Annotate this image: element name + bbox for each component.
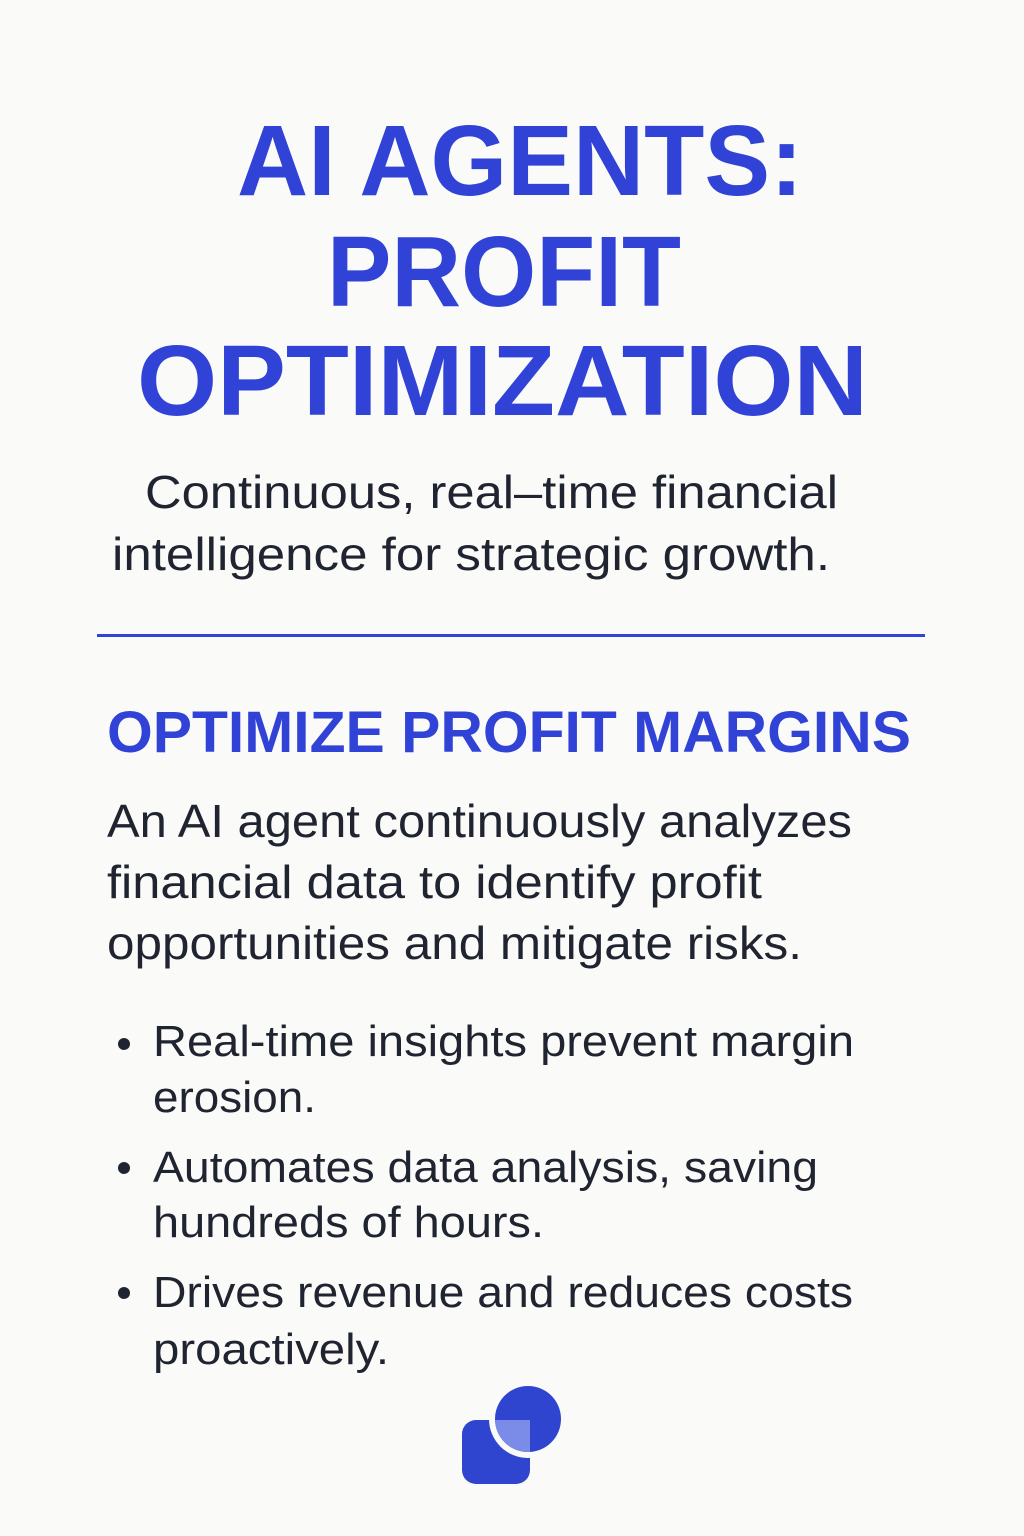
bullet list: proactively. bbox=[153, 1325, 389, 1374]
bullet list: hundreds of hours. bbox=[153, 1198, 544, 1247]
bullet list: Automates data analysis, saving bbox=[153, 1143, 818, 1192]
title: AI AGENTS: bbox=[237, 105, 803, 217]
section heading: OPTIMIZE PROFIT MARGINS bbox=[107, 700, 911, 765]
paragraph: opportunities and mitigate risks. bbox=[107, 917, 802, 969]
subtitle bbox=[112, 466, 838, 580]
subtitle: intelligence for strategic growth. bbox=[112, 528, 830, 580]
paragraph bbox=[107, 795, 852, 969]
title bbox=[137, 105, 868, 437]
bullet list bbox=[118, 1017, 854, 1374]
bullet list: Drives revenue and reduces costs bbox=[153, 1268, 853, 1317]
icon: logo bbox=[462, 1386, 561, 1484]
subtitle: Continuous, real–time financial bbox=[145, 466, 838, 518]
bullet list: erosion. bbox=[153, 1073, 316, 1122]
title: PROFIT bbox=[327, 216, 681, 328]
paragraph: financial data to identify profit bbox=[107, 856, 762, 908]
title: OPTIMIZATION bbox=[137, 325, 868, 437]
paragraph: An AI agent continuously analyzes bbox=[107, 795, 852, 847]
bullet list: Real-time insights prevent margin bbox=[153, 1017, 854, 1066]
